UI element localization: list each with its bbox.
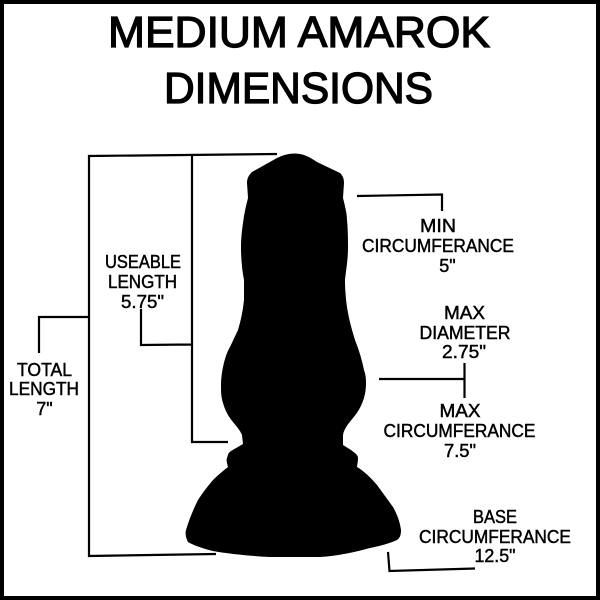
bracket: max diameter and circumference [379,363,465,398]
label: max diameter: MAX [444,303,485,323]
label: max diameter: DIAMETER [420,323,510,343]
label: max diameter: 2.75" [442,342,486,362]
bracket: total length [39,154,277,556]
label: min circumference: 5" [439,256,456,276]
label: total length: TOTAL [17,360,72,380]
product silhouette [186,154,401,557]
bracket: min circumference [357,194,442,211]
label: total length: 7" [36,399,53,419]
label: min circumference [362,216,514,276]
label: useable length [105,252,181,312]
title: MEDIUM AMAROK [108,8,490,57]
label: useable length: USEABLE [105,252,181,272]
label: max circumference [384,401,536,461]
label: max circumference: 7.5" [444,441,476,461]
label: base circumference: BASE [473,507,517,527]
label: total length: LENGTH [9,379,79,399]
label: max circumference: MAX [440,401,480,421]
label: min circumference: MIN [420,216,456,236]
label: total length [9,360,79,419]
bracket: useable length [141,156,228,442]
label: max circumference: CIRCUMFERANCE [384,421,536,441]
label: min circumference: CIRCUMFERANCE [362,236,514,256]
title [108,8,490,113]
label: useable length: LENGTH [108,272,177,292]
bracket: base circumference [388,552,475,571]
label: useable length: 5.75" [121,292,164,312]
label: max diameter [420,303,510,362]
label: base circumference: 12.5" [474,546,516,566]
label: base circumference: CIRCUMFERANCE [419,527,571,547]
title: DIMENSIONS [164,64,433,113]
label: base circumference [419,507,571,566]
